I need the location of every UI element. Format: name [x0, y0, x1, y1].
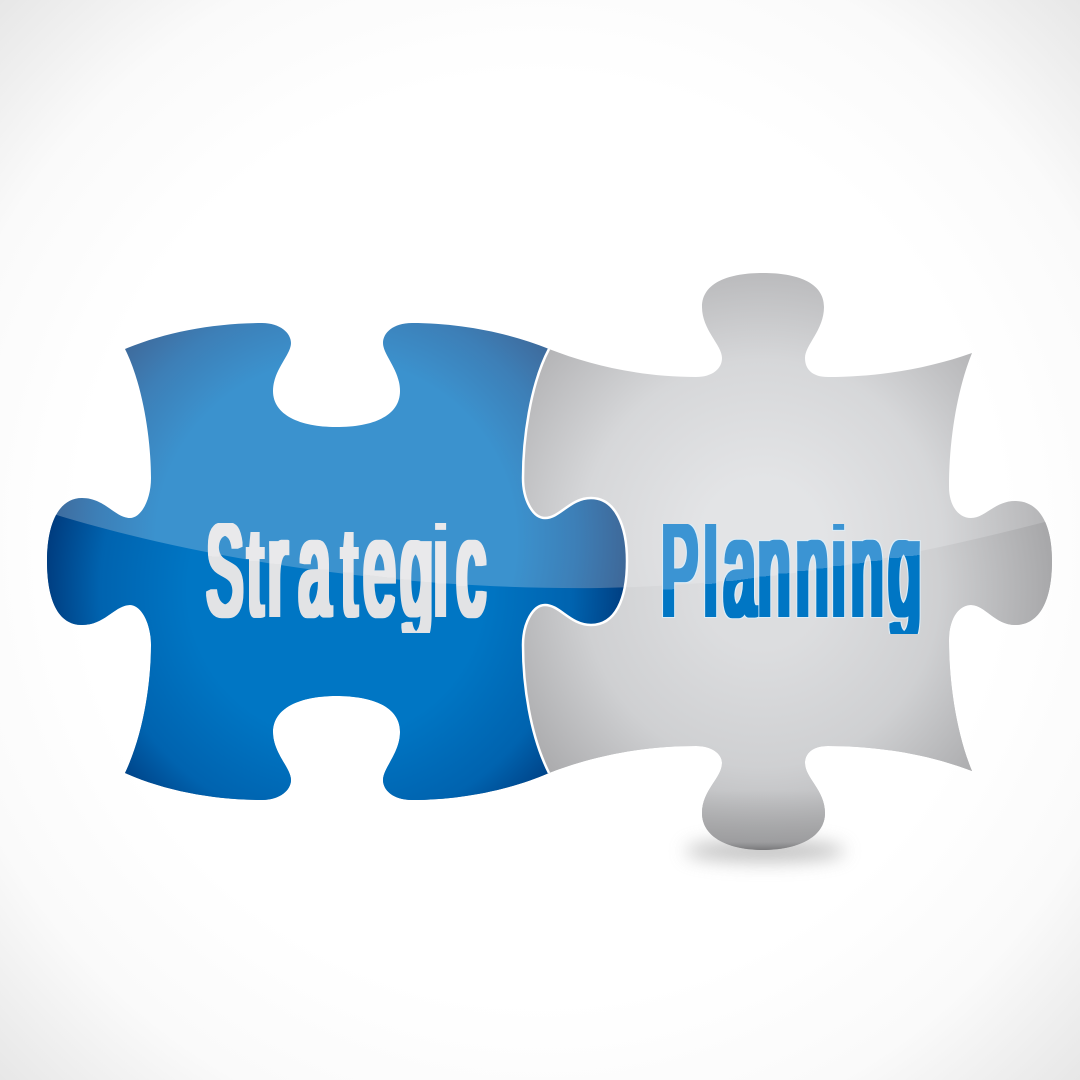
heading word: Planning: l [704, 494, 717, 645]
heading word: Strategic: e [364, 494, 395, 645]
heading word: Planning: P [662, 499, 698, 644]
heading word: Strategic: t [248, 503, 263, 642]
heading word: Strategic: r [268, 494, 287, 645]
heading word: Planning: n [796, 494, 828, 645]
heading word: Strategic: c [457, 494, 485, 645]
white seam between the pieces [523, 349, 627, 773]
heading word: Planning: n [758, 494, 790, 645]
heading word: Planning: n [851, 494, 883, 645]
heading word: Planning: a [724, 494, 755, 645]
heading word: Strategic: t [342, 503, 357, 642]
panel: blue puzzle piece [40, 315, 635, 810]
heading word: Planning [662, 524, 921, 634]
shadow under grey puzzle piece [685, 840, 845, 862]
panel: grey puzzle piece [524, 273, 1052, 850]
heading word: Strategic: a [299, 494, 330, 645]
heading word: Strategic: i [434, 494, 447, 645]
heading word: Planning: i [832, 494, 845, 645]
heading word: Strategic [206, 523, 487, 633]
heading word: Strategic: S [207, 499, 243, 644]
heading word: Planning: g [889, 494, 920, 645]
heading word: Strategic: g [401, 494, 432, 645]
